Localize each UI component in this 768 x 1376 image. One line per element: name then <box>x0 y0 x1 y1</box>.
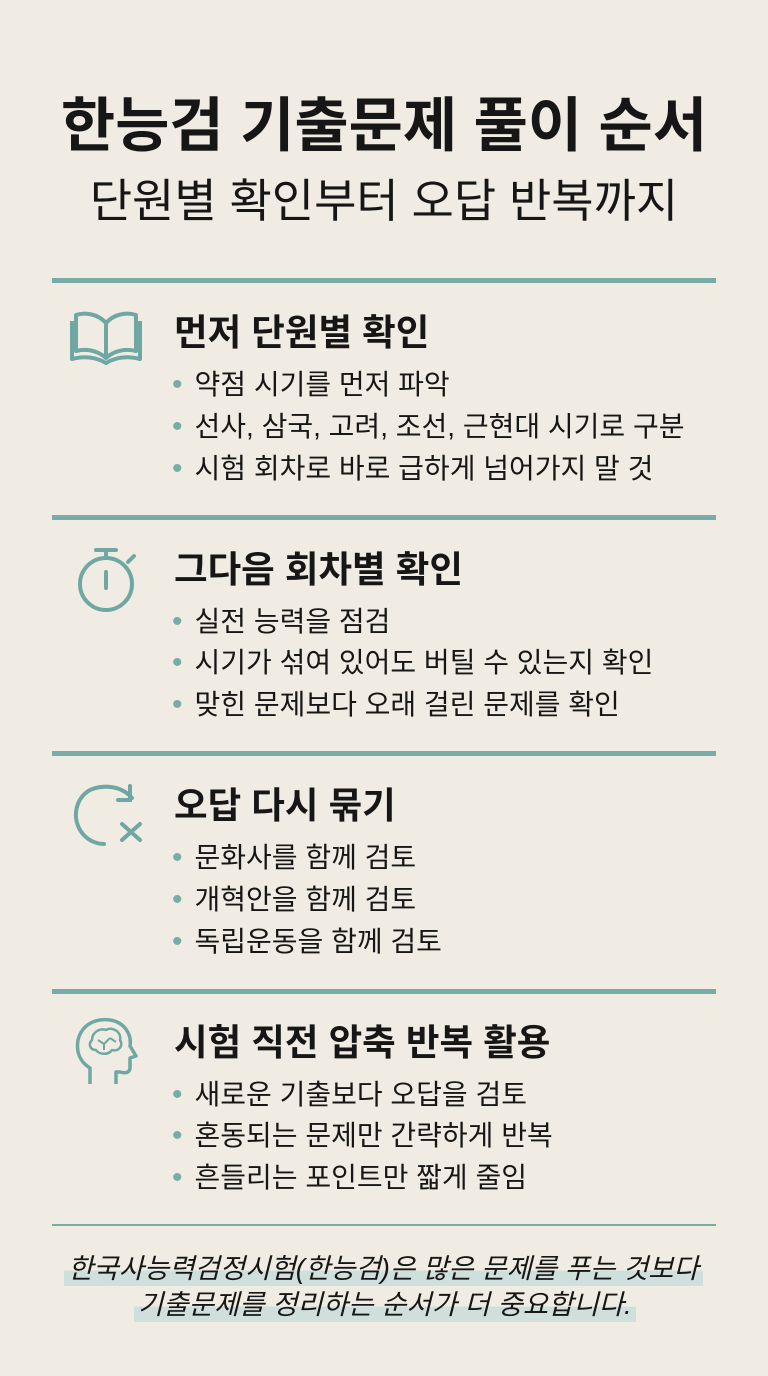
bullets: • 실전 능력을 점검 <box>172 605 390 638</box>
panel: section 3: • 개혁안을 함께 검토 <box>172 883 416 916</box>
panel: section 2: • 시기가 섞여 있어도 버틸 수 있는지 확인 <box>172 646 653 679</box>
panel: section 2: • 맞힌 문제보다 오래 걸린 문제를 확인 <box>172 688 620 721</box>
title: 한능검 기출문제 풀이 순서 <box>61 93 707 159</box>
footer callout <box>64 1253 703 1322</box>
icon: stopwatch <box>78 548 136 612</box>
footer callout: 한국사능력검정시험(한능검)은 많은 문제를 푸는 것보다 <box>68 1253 699 1284</box>
panel: section 4: • 혼동되는 문제만 간략하게 반복 <box>172 1119 553 1152</box>
bullets: • 새로운 기출보다 오답을 검토 <box>172 1078 527 1111</box>
panel: section 4 <box>76 1018 553 1194</box>
panel: section 3 <box>74 784 442 958</box>
panel: section 3: • 독립운동을 함께 검토 <box>172 925 442 958</box>
icon: retry with x <box>74 784 142 846</box>
bullets: • 문화사를 함께 검토 <box>172 841 416 874</box>
panel: section 4: • 흔들리는 포인트만 짧게 줄임 <box>172 1161 527 1194</box>
panel: section 1: • 시험 회차로 바로 급하게 넘어가지 말 것 <box>172 452 653 485</box>
footer callout: 기출문제를 정리하는 순서가 더 중요합니다. <box>138 1289 632 1320</box>
panel: section 1 <box>70 312 684 485</box>
panel: section 1: • 선사, 삼국, 고려, 조선, 근현대 시기로 구분 <box>172 410 684 443</box>
subtitle: 단원별 확인부터 오답 반복까지 <box>90 175 678 227</box>
heading: 그다음 회차별 확인 <box>174 549 463 590</box>
panel: section 2 <box>78 548 653 721</box>
icon: head with brain <box>76 1018 138 1084</box>
heading: 오답 다시 묶기 <box>174 785 396 826</box>
bullets: • 약점 시기를 먼저 파악 <box>172 368 450 401</box>
heading: 먼저 단원별 확인 <box>174 312 429 353</box>
heading: 시험 직전 압축 반복 활용 <box>174 1022 550 1063</box>
icon: book <box>70 312 142 365</box>
